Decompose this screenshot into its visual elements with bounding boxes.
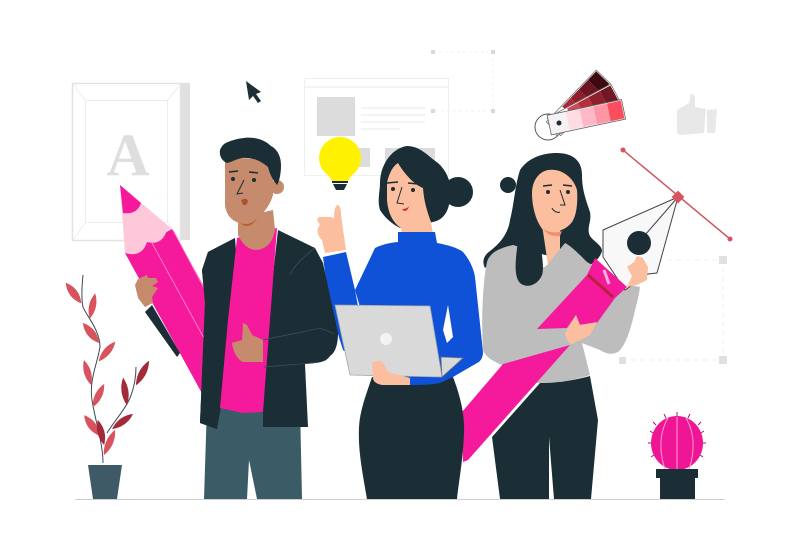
dark trousers: [492, 376, 598, 499]
icon: colour swatch fan: [535, 70, 626, 140]
hair front strand: [516, 195, 543, 286]
face: [225, 158, 273, 224]
hair: [379, 146, 450, 228]
jacket: [200, 230, 338, 429]
long hair: [483, 153, 602, 268]
hand under laptop: [372, 361, 410, 385]
jacket seams: [263, 248, 335, 367]
ear: [270, 180, 284, 194]
centre woman: [317, 146, 483, 499]
bulb: [319, 137, 361, 190]
man: [135, 138, 338, 499]
big pencil: [120, 185, 206, 397]
cactus pot: [656, 469, 698, 499]
trousers: [204, 405, 302, 499]
thumbs-up hand: [232, 323, 263, 362]
pink shirt: [220, 228, 277, 413]
plant pot: [88, 465, 122, 499]
pen tool nib: [603, 197, 678, 290]
eyes and nose: [543, 185, 572, 212]
background frame with letter A: [72, 83, 190, 240]
cactus in pot: [648, 412, 706, 499]
web page mockup: [304, 78, 448, 176]
raised hand: [317, 205, 346, 253]
hand holding nib: [627, 256, 648, 287]
pen tool upper body: [537, 258, 627, 329]
hair bun: [500, 177, 516, 193]
blue turtleneck: [355, 232, 483, 385]
laptop: [335, 305, 463, 377]
plant in pot: [62, 275, 152, 499]
eyes, nose, mouth: [229, 171, 258, 205]
blue sleeve: [323, 252, 370, 370]
eyes and mouth: [387, 182, 418, 211]
face: [532, 170, 577, 232]
neck: [238, 210, 275, 250]
letter A: A: [106, 122, 150, 188]
neck: [542, 225, 560, 265]
gap under arm: [443, 305, 453, 343]
bun: [443, 177, 473, 207]
icon: thumbs up: [677, 93, 717, 135]
ground line: [75, 498, 725, 500]
bezier handle line: [620, 148, 732, 242]
left sleeve: [145, 305, 180, 357]
grey top: [482, 243, 640, 383]
pen tool lower body: [462, 345, 570, 462]
jacket left panel: [200, 238, 235, 429]
hair: [220, 138, 281, 185]
face and neck: [387, 163, 433, 234]
selection box top: [431, 50, 495, 113]
hand holding pen body: [565, 315, 597, 344]
right woman: [482, 153, 640, 499]
skirt: [359, 377, 464, 499]
hand on pencil: [135, 275, 158, 307]
selection box right: [619, 256, 727, 364]
cursor arrow: [246, 81, 261, 103]
